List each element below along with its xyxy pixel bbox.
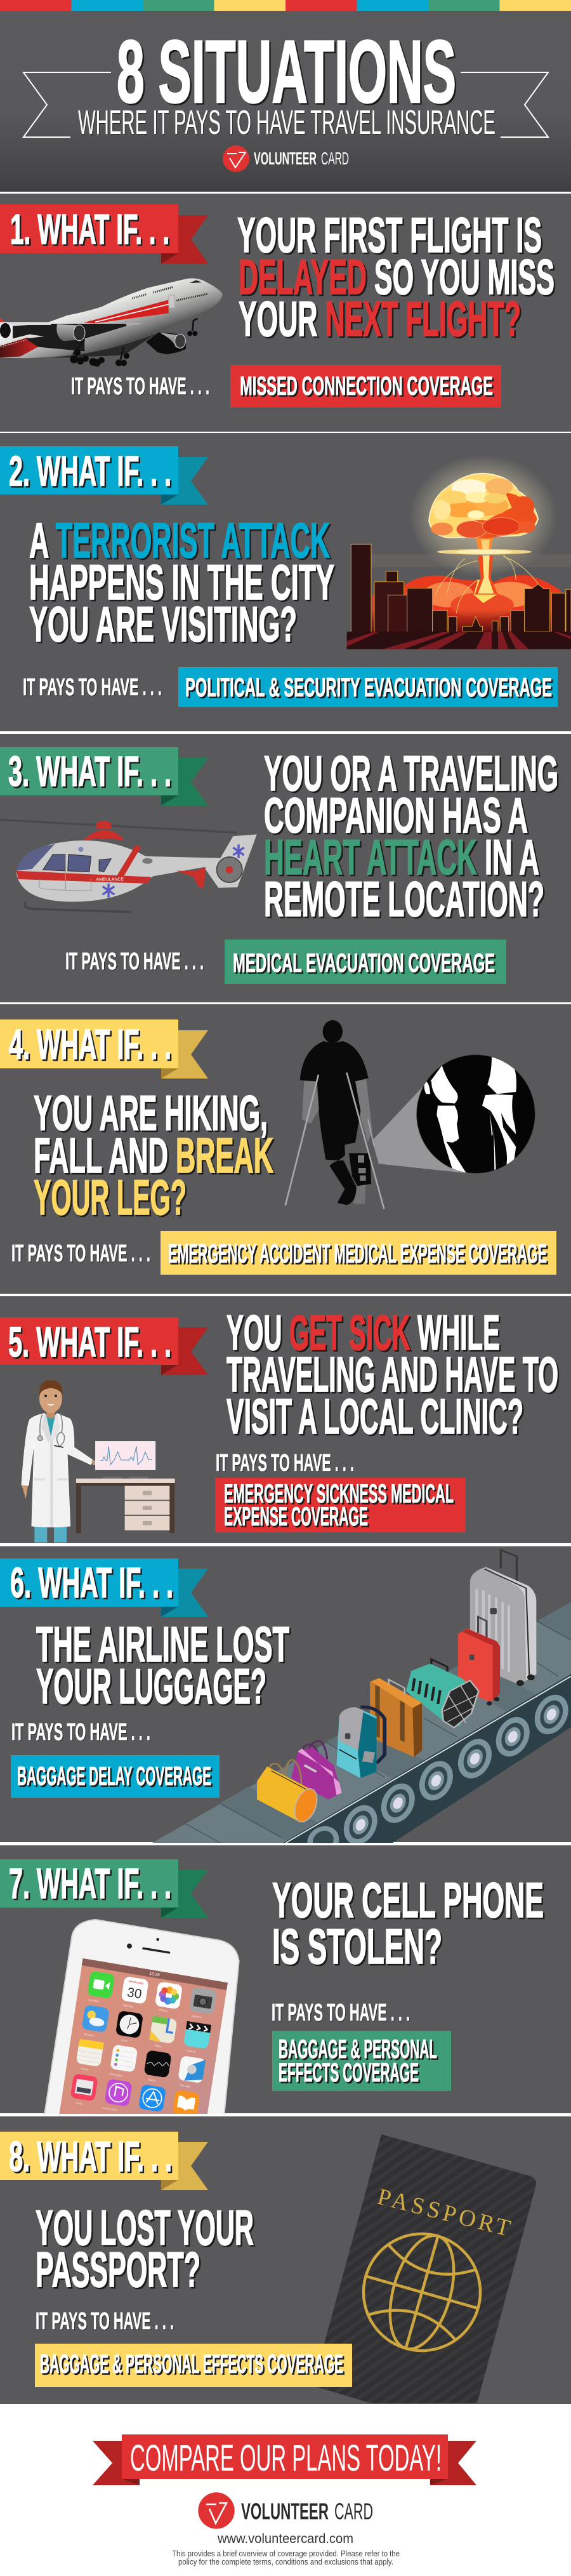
illustration: smartphone: Facetime [88,1998,100,2003]
panel: situation 3 [0,734,571,1002]
question 2 [29,512,334,652]
title ribbon outline [23,72,548,137]
yellow duffel bag [257,1760,321,1824]
ribbon: 3. what if: 3. WHAT IF. . . [8,748,171,795]
panel: situation 8 [0,2116,571,2404]
illustration: smartphone: Photos [159,2008,168,2012]
ribbon: 6. what if: 6. WHAT IF. . . [10,1559,173,1607]
illustration: passport [317,2134,536,2403]
coverage 8 [35,2344,352,2387]
question 7: IS STOLEN? [272,1918,442,1974]
orange briefcase [370,1678,422,1757]
it pays to have 6: IT PAYS TO HAVE . . . [11,1719,150,1746]
red suitcase [458,1617,500,1706]
coverage 7: EFFECTS COVERAGE [279,2057,419,2087]
illustration: smartphone: Weather [84,2033,95,2037]
question 7 [272,1872,544,1974]
panel: situation 1 [0,194,571,432]
illustration: smartphone: iTunes Store [102,2106,118,2112]
question 4: YOUR LEG? [34,1169,187,1225]
illustration: smartphone [44,1920,239,2118]
question 8: YOU LOST YOUR [36,2200,254,2255]
illustration: smartphone: News [75,2101,83,2106]
illustration: smartphone: Reminders [109,2072,123,2078]
illustration: smartphone: Wednesday [128,1979,145,1985]
illustration: smartphone: Clock [121,2038,128,2043]
illustration: smartphone: Stocks [147,2078,156,2082]
ribbon: 1. what if: 1. WHAT IF. . . [10,206,169,253]
illustration: smartphone: Camera [191,2014,202,2019]
illustration: smartphone: Your app [179,2083,191,2088]
illustration: mushroom cloud over city [347,455,571,649]
illustration: smartphone: 15:26 [149,1972,161,1977]
question 3 [264,745,558,927]
logo: volunteer card footer: VOLUNTEER [241,2499,329,2524]
question 4: YOU ARE HIKING, [34,1085,268,1141]
it pays to have 5: IT PAYS TO HAVE . . . [216,1450,354,1477]
panel: situation 5 [0,1296,571,1543]
illustration: smartphone: Maps [154,2043,161,2048]
coverage 4 [161,1231,556,1275]
question 1 [237,207,555,347]
logo: volunteer card [223,145,349,172]
ribbon: 7. what if [0,1859,208,1918]
ribbon: 2. what if: 2. WHAT IF. . . [9,448,171,495]
coverage 6: BAGGAGE DELAY COVERAGE [17,1761,211,1791]
disclaimer: This provides a brief overview of coverage provided. Please refer to the [172,2549,400,2558]
it pays to have 1: IT PAYS TO HAVE . . . [71,373,209,400]
logo: volunteer card footer: CARD [334,2499,373,2524]
it pays to have 2: IT PAYS TO HAVE . . . [23,674,162,701]
pink handbag [291,1741,342,1800]
illustration: smartphone: Notes [81,2067,89,2071]
illustration: smartphone: Videos [187,2049,196,2054]
silver suitcase [470,1550,536,1686]
question 6: THE AIRLINE LOST [36,1616,289,1672]
ribbon: 3. what if [0,747,208,806]
ribbon: 8. what if: 8. WHAT IF. . . [9,2133,172,2181]
panel: situation 4 [0,1004,571,1294]
illustration: man on crutches with x-ray [286,1020,535,1208]
illustration: smartphone: 30 [126,1985,143,2002]
ribbon: 6. what if [0,1558,208,1617]
question 2: A TERRORIST ATTACK [29,512,330,568]
coverage 6 [11,1755,220,1798]
call to action ribbon [93,2434,476,2485]
logo: volunteer card: CARD [321,149,349,168]
coverage 5 [215,1478,466,1532]
it pays to have 7: IT PAYS TO HAVE . . . [272,2000,410,2026]
ribbon: 4. what if [0,1019,208,1079]
icon: airplane [0,278,223,367]
icon: air ambulance helicopter: AMBULANCE [96,877,124,882]
panel: situation 6 [0,1546,571,1859]
question 6: YOUR LUGGAGE? [36,1658,266,1714]
panel: header [0,11,571,192]
question 6 [36,1616,289,1714]
illustration: passport: PASSPORT [375,2184,513,2242]
logo: volunteer card: VOLUNTEER [254,149,317,168]
ribbon: 7. what if: 7. WHAT IF. . . [9,1860,171,1908]
ribbon: 8. what if [0,2132,208,2190]
panel: footer [93,2434,476,2566]
question 4: FALL AND BREAK [34,1127,273,1183]
ribbon: 4. what if: 4. WHAT IF. . . [9,1021,171,1068]
it pays to have 4: IT PAYS TO HAVE . . . [11,1240,150,1267]
panel: situation 2 [0,433,571,731]
question 8 [36,2200,254,2297]
colour stripe header bar [0,0,571,11]
green pet carrier [406,1659,478,1728]
coverage 7 [272,2031,451,2091]
disclaimer [172,2549,400,2566]
it pays to have 8: IT PAYS TO HAVE . . . [36,2308,174,2335]
question 4 [34,1085,273,1225]
question 5 [226,1305,558,1444]
teal backpack [336,1707,384,1778]
ribbon: 2. what if [0,446,208,505]
website url: www.volunteercard.com [217,2532,353,2546]
it pays to have 3: IT PAYS TO HAVE . . . [65,948,204,975]
illustration: doctor at desk [22,1380,175,1543]
panel: situation 7 [0,1845,571,2118]
illustration: smartphone: Calendar [122,2003,134,2008]
coverage 3 [225,939,506,984]
ribbon: 5. what if [0,1317,208,1375]
coverage 5: EXPENSE COVERAGE [224,1501,368,1531]
question 2: YOU ARE VISITING? [29,596,297,652]
coverage 1 [230,365,501,408]
disclaimer: policy for the complete terms, conditions and exclusions that apply. [178,2558,393,2566]
ribbon: 1. what if [0,204,208,264]
question 8: PASSPORT? [36,2241,200,2297]
question 2: HAPPENS IN THE CITY [29,554,334,610]
illustration: luggage on conveyor belt [152,1550,571,1859]
ribbon: 5. what if: 5. WHAT IF. . . [8,1318,171,1366]
logo: volunteer card footer [198,2492,373,2529]
icon: air ambulance helicopter [0,820,257,912]
